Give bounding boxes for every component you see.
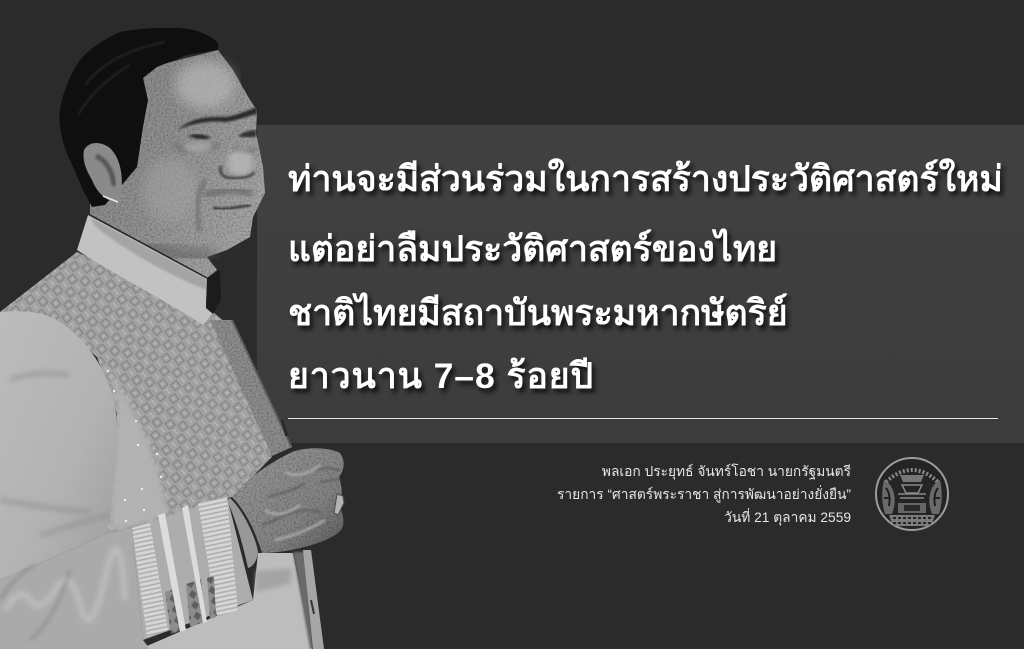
quote line 2: แต่อย่าลืมประวัติศาสตร์ของไทย: [288, 229, 777, 269]
attribution text: พลเอก ประยุทธ์ จันทร์โอชา นายกรัฐมนตรี: [602, 464, 851, 479]
collar opening: [206, 270, 221, 314]
quote line 4: ยาวนาน 7–8 ร้อยปี: [288, 356, 594, 396]
quote line 1: ท่านจะมีส่วนร่วมในการสร้างประวัติศาสตร์ใหม่: [288, 159, 1003, 199]
nasolabial fold: [197, 180, 206, 232]
forearm: [0, 528, 150, 649]
vest body: [0, 252, 272, 533]
divider rule: [288, 418, 998, 419]
attribution text: รายการ “ศาสตร์พระราชา สู่การพัฒนาอย่างยั่งยืน”: [557, 487, 851, 502]
cuff: [132, 497, 253, 640]
lapel trim: [210, 320, 292, 456]
ear: [83, 143, 122, 203]
brows: [177, 107, 257, 130]
collar: [77, 215, 213, 325]
lower vest: [140, 553, 312, 649]
quote line 3: ชาติไทยมีสถาบันพระมหากษัตริย์: [288, 293, 788, 333]
mouth: [205, 190, 252, 196]
inner cuff band: [227, 498, 258, 568]
attribution text: [557, 464, 851, 526]
hand: [232, 448, 344, 553]
eyes: [188, 134, 211, 139]
hair: [59, 28, 218, 207]
ring: [334, 494, 344, 515]
vest light band with dots: [97, 357, 168, 530]
eye bags: [174, 143, 256, 153]
skin: face and neck: [90, 50, 265, 278]
forehead highlight: [175, 61, 235, 109]
under-chin shadow: [135, 245, 215, 257]
upper sleeve: [0, 311, 117, 580]
right vest trim: [303, 550, 324, 649]
panel: quote background: [257, 125, 1024, 443]
cheek highlight: [142, 158, 198, 222]
attribution text: วันที่ 21 ตุลาคม 2559: [724, 510, 851, 525]
nose: [227, 150, 253, 176]
